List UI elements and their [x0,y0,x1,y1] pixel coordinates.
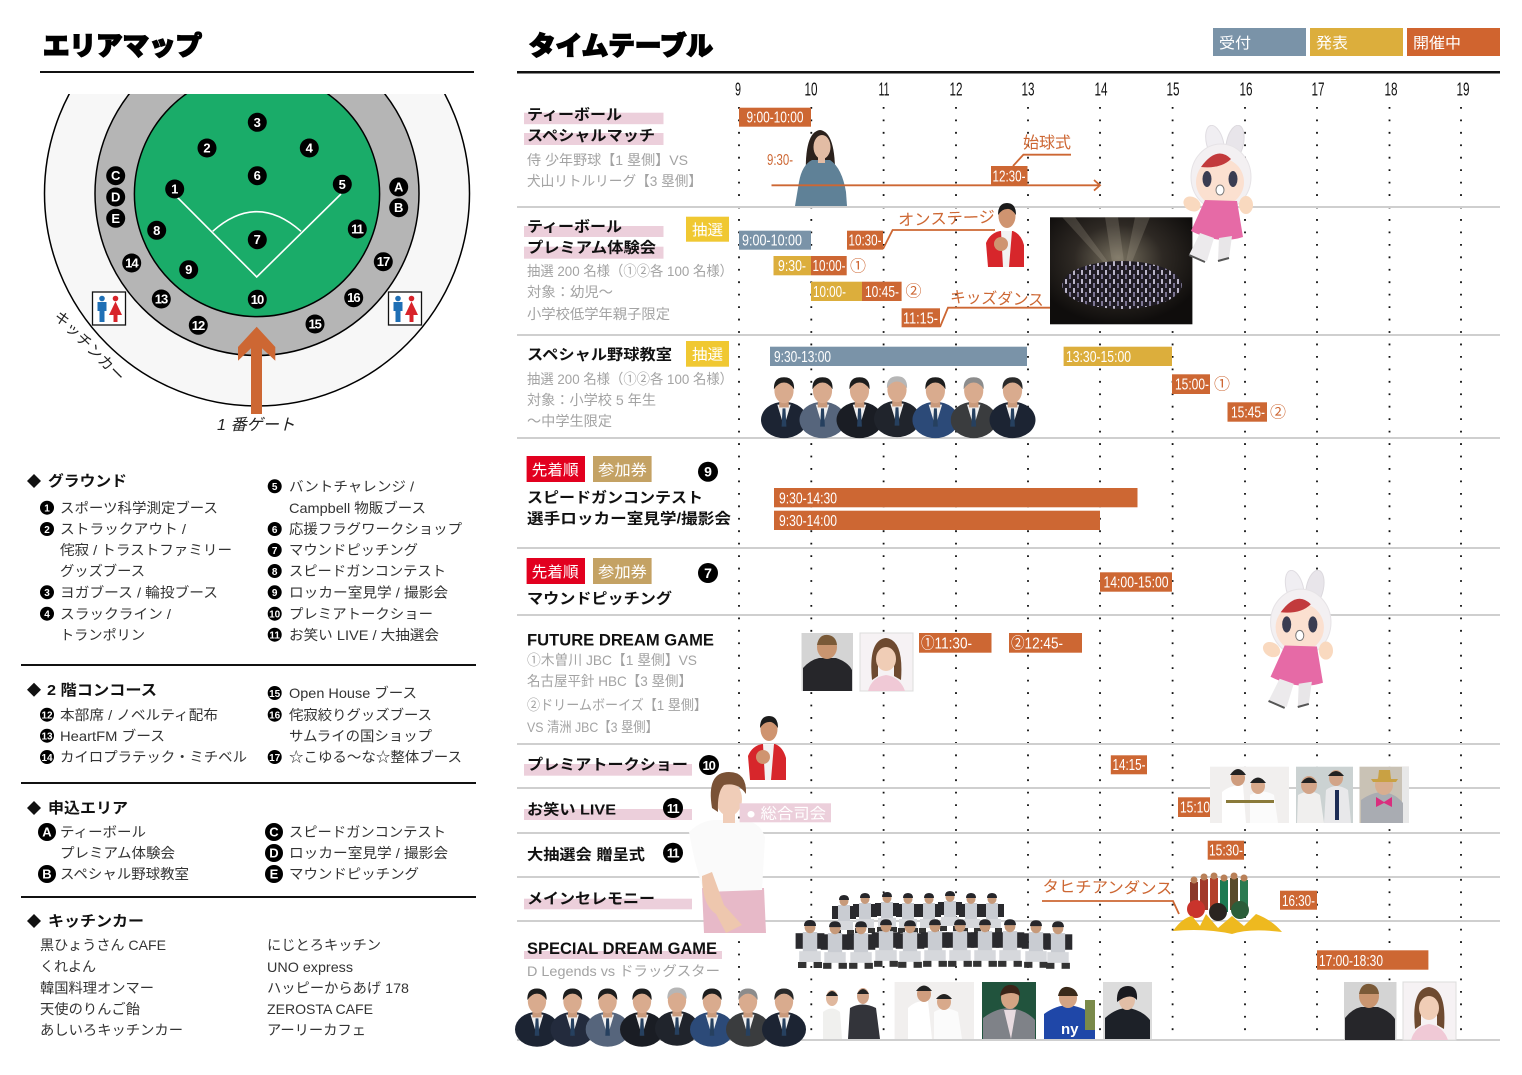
chart axis: hour labels: 13 [1022,80,1034,100]
list: ground booths right column: ロッカー室見学 / 撮影会 [289,584,448,600]
bar: 14:15 [1111,755,1147,774]
badge: lottery: 抽選 [692,346,723,364]
badge: lottery [686,341,729,367]
label: kitchen car: キッチンカー [50,308,128,386]
list: ground booths right column: 8 [272,567,278,578]
label: tee ball premium experience: 対象：幼児～ [527,284,613,300]
list: kitchen cars left column: 黒ひょうさん CAFE [40,937,166,953]
label: special baseball class: 対象：小学校 5 年生 [527,392,656,408]
badges: first come and ticket: 先着順 [532,564,579,581]
numbered map markers: B [394,200,403,215]
list: kitchen cars left column: 韓国料理オンマー [40,980,154,996]
heading: area map: エリアマップ [43,31,202,61]
list: application left column [38,823,189,883]
list: concourse booths right column: 侘寂絞りグッズブース [289,707,432,723]
photo: commentator woman repeat [1403,982,1456,1040]
label: future dream game: ①木曽川 JBC【1 塁側】VS [527,652,697,668]
bar: 14:15: 14:15- [1112,757,1146,774]
photo: comedy duo in uniform [1210,767,1289,823]
numbered map markers: 7 [254,232,261,247]
list: application left column: ティーボール [60,824,146,840]
chart axis: hour labels: 11 [878,80,890,100]
label: future dream game: ②ドリームボーイズ【1 塁側】 [527,697,707,713]
row: mound pitching [527,558,1172,608]
list: kitchen cars left column: あしいろキッチンカー [40,1022,183,1038]
photo: woman host [795,130,847,206]
marker: area 10 [699,755,719,775]
list: ground booths left column: ヨガブース / 輪投ブース [60,584,218,600]
row: comedy live [524,767,1409,823]
badges: first come and ticket: 参加券 [598,564,647,581]
legend: status colours: 受付 [1219,35,1251,52]
badge: general MC: ● 総合司会 [746,806,826,822]
numbered map markers: 13 [155,292,168,306]
list: ground booths left column: ストラックアウト / [60,521,186,537]
list: concourse booths left column: 14 [41,753,53,764]
label: tee ball premium experience [524,218,733,322]
photo: kids dance stage [1050,217,1192,324]
photo: comedian in hat [1360,767,1409,823]
callout: on stage: 10:30- [848,232,882,250]
panel: second floor concourse list [27,682,462,765]
bar: 14:00-15:00 [1100,572,1172,592]
photo: two men standing [823,988,880,1039]
bar: 15:00 session 1: 15:00- [1175,376,1209,394]
bar: 15:10: 15:10- [1180,800,1214,816]
label: special dream game [524,939,722,979]
numbered map markers: 12 [192,318,205,333]
label: future dream game: FUTURE DREAM GAME [527,630,714,650]
chart axis: hour labels: 14 [1094,80,1108,100]
label: mound pitching: マウンドピッチング [527,590,672,608]
numbered map markers: 4 [306,140,314,156]
marker: area 7 [698,563,718,583]
bar: 15:10 [1178,797,1215,817]
bar: 16:30: 16:30- [1282,893,1315,910]
list: application left column: プレミアム体験会 [60,845,175,861]
heading: timetable: タイムテーブル [529,31,713,61]
list: concourse booths left column: 12 [41,710,53,722]
list: ground booths left column: グッズブース [60,563,145,579]
marker: area 9 [698,462,718,482]
list: concourse booths right column [268,685,462,765]
photos: seven instructors [761,376,1036,438]
label: speed gun and locker tour [527,490,731,528]
photo: man in black [1103,982,1152,1039]
list: concourse booths right column: Open House ブース [289,685,417,701]
chart axis: hour labels [735,80,1470,100]
bar: game two 12:45: ②12:45- [1011,634,1063,652]
list: kitchen cars left column [40,937,183,1038]
numbered map markers: 2 [203,140,211,156]
legend: status colours [1213,28,1500,56]
numbered map markers: D [111,190,120,204]
badges: first come and ticket: 参加券 [598,462,647,479]
row: main ceremony [524,872,1317,934]
bar: 9:00-10:00: 9:00-10:00 [746,110,804,126]
numbered map markers: 5 [339,177,346,192]
row: premier talk show [524,755,1147,776]
list: ground booths left column: トランポリン [60,627,145,643]
callout: kids dance: キッズダンス [950,288,1044,310]
row: special dream game [515,939,1456,1047]
list: ground booths left column: 侘寂 / トラストファミリー [60,542,232,558]
chart axis: hour labels: 16 [1240,80,1252,100]
row: grand lottery [527,841,1244,864]
bars: first session: 10:00- [812,258,846,275]
label: tee ball premium experience: プレミアム体験会 [527,240,656,256]
label: tee ball special match: 侍 少年野球【1 塁側】VS [527,152,688,168]
bar: 17:00-18:30: 17:00-18:30 [1319,953,1383,970]
photos: eight legends players [515,988,806,1047]
callout: first pitch: 始球式 [1023,134,1071,152]
icon: left restroom [92,292,126,325]
list: kitchen cars right column: ハッピーからあげ 178 [267,980,409,996]
panel: ground list [27,472,462,643]
list: ground booths right column: Campbell 物販ブース [289,500,426,516]
list: ground booths left column: 4 [44,610,50,620]
callout: on stage: オンステージ [898,209,995,230]
list: kitchen cars right column: アーリーカフェ [267,1022,366,1038]
bar: 9:00-10:00 [739,108,811,127]
label: special baseball class: 抽選 200 名様（①②各 100 名様） [527,371,733,387]
label: special dream game: SPECIAL DREAM GAME [527,939,717,958]
heading: second floor concourse: 2 階コンコース [47,682,157,699]
bar: 14:00-15:00: 14:00-15:00 [1104,574,1169,592]
numbered map markers: 15 [308,316,322,332]
badge: lottery [686,217,729,242]
numbered map markers: 9 [185,262,192,277]
bar: reception 9:00-10:00: 9:00-10:00 [742,232,802,250]
list: ground booths left column: スラックライン / [60,606,171,622]
list: application left column: スペシャル野球教室 [60,866,189,882]
bar: 17:00-18:30 [1317,950,1428,970]
label: premier talk show: プレミアトークショー [527,756,688,774]
label: future dream game: VS 清洲 JBC【3 塁側】 [527,719,658,735]
legend: status colours: 開催中 [1413,35,1461,52]
marker: area 10: 10 [702,758,716,773]
label: speed gun and locker tour: スピードガンコンテスト [527,490,703,506]
callout: kids dance: 11:15- [903,310,938,328]
chart axis: hour labels: 17 [1312,80,1324,100]
bar: 15:45 session 2: ② [1270,404,1286,422]
label: special baseball class: スペシャル野球教室 [527,346,672,364]
photo: comedy duo uniform large [895,982,974,1039]
photo: commentator man [802,633,853,691]
bars: second session: 10:45- [865,284,899,301]
list: ground booths right column: 6 [272,525,278,536]
chart axis: hour labels: 19 [1456,80,1470,100]
badge: lottery: 抽選 [692,222,723,239]
label: tee ball premium experience: 小学校低学年親子限定 [527,306,670,322]
bar: reception 9:30-13:00 [770,347,1027,366]
list: ground booths right column: スピードガンコンテスト [289,563,446,579]
label: tee ball premium experience: ティーボール [527,218,622,236]
marker: area 11 [663,843,683,863]
numbered map markers: 17 [377,254,390,269]
row: tee ball special match [524,106,1100,206]
label: main ceremony: メインセレモニー [527,890,655,908]
heading: kitchen car: キッチンカー [48,913,144,930]
chart axis: hour labels: 12 [950,80,962,100]
row: tee ball premium experience [524,203,1192,328]
label: tee ball special match: スペシャルマッチ [527,128,655,144]
list: concourse booths left column: カイロプラテック・ミチベル [60,749,247,765]
list: application left column: B [42,866,52,882]
label: tee ball special match: ティーボール [527,106,622,124]
bar: 9:30-14:30 [774,488,1138,508]
chart axis: hour labels: 9 [735,80,741,100]
label: 9:30 start: 9:30- [767,152,793,169]
marker: area 11 [663,798,683,818]
panel: kitchen car list [27,913,409,1038]
label: future dream game: 名古屋平針 HBC【3 塁側】 [527,673,692,689]
callout: first pitch: 12:30- [992,168,1026,186]
label: grand lottery: 大抽選会 贈呈式 [527,846,645,864]
bar: 15:00 session 1: ① [1214,376,1230,394]
callout: tahitian dance [1042,878,1179,914]
list: ground booths left column: 2 [44,525,50,536]
list: kitchen cars right column [267,937,409,1038]
photo: man in blue jersey: ny [1061,1021,1079,1038]
list: ground booths right column: 11 [269,630,280,642]
list: kitchen cars right column: ZEROSTA CAFE [267,1001,373,1017]
list: ground booths right column: バントチャレンジ / [289,478,414,494]
label: comedy live [524,800,692,820]
label: special baseball class: ～中学生限定 [527,413,612,429]
bars: first session: ① [850,258,866,276]
list: concourse booths right column: 17 [269,753,281,764]
mascot: rabbit character upper [1181,123,1253,262]
baseball diamond lines [177,194,341,277]
bar: reception 9:30-13:00: 9:30-13:00 [774,349,831,366]
bars: first session [774,256,866,276]
photo: man in blue jersey [1044,987,1095,1039]
bar: game one 11:30: ①11:30- [921,634,972,652]
map circles: concourse and field [44,94,470,407]
list: ground booths left column: 1 [44,504,50,514]
list: ground booths right column: マウンドピッチング [289,542,418,558]
numbered map markers: 6 [254,168,261,183]
numbered map markers: E [111,211,120,226]
bar: 15:00 session 1 [1172,374,1230,394]
marker: area 9: 9 [704,464,712,480]
numbered map markers: 14 [125,256,139,270]
list: concourse booths left column [40,707,247,765]
list: application right column [265,823,448,883]
bars: second session: ② [906,282,922,300]
photo: tahitian dancers [1173,872,1282,934]
photo: commentator man repeat [1344,982,1396,1040]
list: application right column: C [269,824,279,840]
list: application right column: E [270,866,279,882]
bar: 15:45 session 2 [1228,402,1286,422]
numbered map markers: 8 [153,223,160,238]
list: application right column: ロッカー室見学 / 撮影会 [289,845,448,861]
marker: area 7: 7 [704,565,712,581]
numbered map markers: 10 [251,292,264,307]
label: tee ball special match: 犬山リトルリーグ【3 塁側】 [527,173,702,189]
arrow: match duration [772,180,1100,191]
list: concourse booths left column: HeartFM ブース [60,728,165,744]
list: ground booths right column: 応援フラグワークショップ [289,521,462,537]
label: comedy live: お笑い LIVE [527,800,616,818]
row: speed gun contest and locker tour [527,456,1138,530]
list: ground booths right column: 9 [272,588,278,599]
list: ground booths left column: スポーツ科学測定ブース [60,500,218,516]
callout: on stage [847,209,995,250]
list: application right column: マウンドピッチング [289,866,419,882]
list: concourse booths right column: 15 [269,689,281,700]
numbered map markers: A [394,180,404,194]
list: kitchen cars left column: くれよん [40,958,96,974]
list: concourse booths right column: ☆こゆる〜な☆整体ブース [289,749,462,765]
list: kitchen cars right column: UNO express [267,959,353,975]
bar: 9:30-14:00: 9:30-14:00 [779,513,837,530]
photo: team group [796,891,1072,969]
label: tee ball special match [524,106,702,189]
photo: man in red happi [986,203,1024,267]
label: tee ball premium experience: 抽選 200 名様（①②各 100 名様） [527,263,733,279]
list: concourse booths left column: 13 [41,732,53,742]
heading: ground: グラウンド [48,472,127,490]
mascot: rabbit character lower [1260,568,1333,708]
list: ground booths right column: 10 [269,610,281,620]
icon: right restroom [388,292,422,325]
label: future dream game [527,630,714,735]
list: ground booths right column: 5 [272,482,278,493]
badges: first come and ticket: 先着順 [532,462,579,479]
photo: man in red happi, talk show [748,716,786,780]
panel: application area list [27,800,448,883]
list: concourse booths left column: 本部席 / ノベルティ配布 [60,707,218,723]
list: ground booths right column: プレミアトークショー [289,606,433,622]
list: application right column: D [269,846,279,860]
heading: application area: 申込エリア [48,800,128,817]
list: concourse booths right column: 16 [269,710,281,722]
bars: second session: 10:00- [813,284,846,301]
label: speed gun and locker tour: 選手ロッカー室見学/撮影会 [527,510,731,528]
list: kitchen cars left column: 天使のりんご飴 [40,1001,140,1017]
badges: first come and ticket [527,558,652,584]
bar: 16:30 [1280,891,1317,910]
label: main ceremony [524,890,692,909]
photo: commentator woman [860,633,913,691]
bar: 15:30 [1208,841,1244,860]
callout: tahitian dance: タヒチアンダンス [1042,878,1173,898]
numbered map markers: 16 [347,290,360,305]
bar: 9:30-14:00 [774,511,1100,530]
bar: announcement 13:30-15:00: 13:30-15:00 [1066,349,1131,366]
label: special dream game: D Legends vs ドラッグスター [527,963,720,979]
label: gate 1: 1 番ゲート [217,416,295,434]
marker: area 11: 11 [667,846,679,860]
list: ground booths left column [40,500,232,643]
callout: kids dance [902,288,1050,328]
chart axis: hour labels: 18 [1384,80,1398,100]
bar: 15:30: 15:30- [1209,842,1243,860]
bars: second session [811,282,922,301]
list: ground booths right column: お笑い LIVE / 大抽選会 [289,627,439,643]
numbered map markers: C [111,168,121,183]
legend: status colours: 発表 [1316,35,1348,52]
photo: general host woman [689,772,766,933]
list: ground booths right column: 7 [272,546,278,557]
bar: announcement 13:30-15:00 [1064,347,1172,366]
numbered map markers: 11 [351,222,364,236]
numbered map markers: 1 [171,182,178,196]
marker: area 11: 11 [667,801,679,816]
chart axis: hour labels: 15 [1166,80,1180,100]
list: ground booths right column [268,478,462,643]
list: application right column: スピードガンコンテスト [289,824,446,840]
photo: comedy duo in suits [1296,767,1353,823]
bar: 9:30-14:30: 9:30-14:30 [779,490,837,508]
list: concourse booths right column: サムライの国ショップ [289,728,432,744]
callout: first pitch [991,134,1071,186]
row: future dream game [527,630,1082,735]
numbered map markers: 3 [254,115,261,130]
map: stadium area map [44,94,470,432]
list: kitchen cars right column: にじとろキッチン [267,937,381,953]
bar: 15:45 session 2: 15:45- [1231,404,1265,422]
arrow: gate 1 entrance [238,327,275,414]
list: ground booths left column: 3 [44,588,50,599]
photo: man in suit outdoors [982,982,1036,1039]
badges: first come and ticket [527,456,652,482]
label: special baseball class [527,346,733,429]
bars: first session: 9:30- [778,258,806,275]
list: application left column: A [42,824,52,840]
numbered map markers [106,113,408,335]
row: special baseball class [527,341,1286,438]
chart axis: hour labels: 10 [804,80,818,100]
